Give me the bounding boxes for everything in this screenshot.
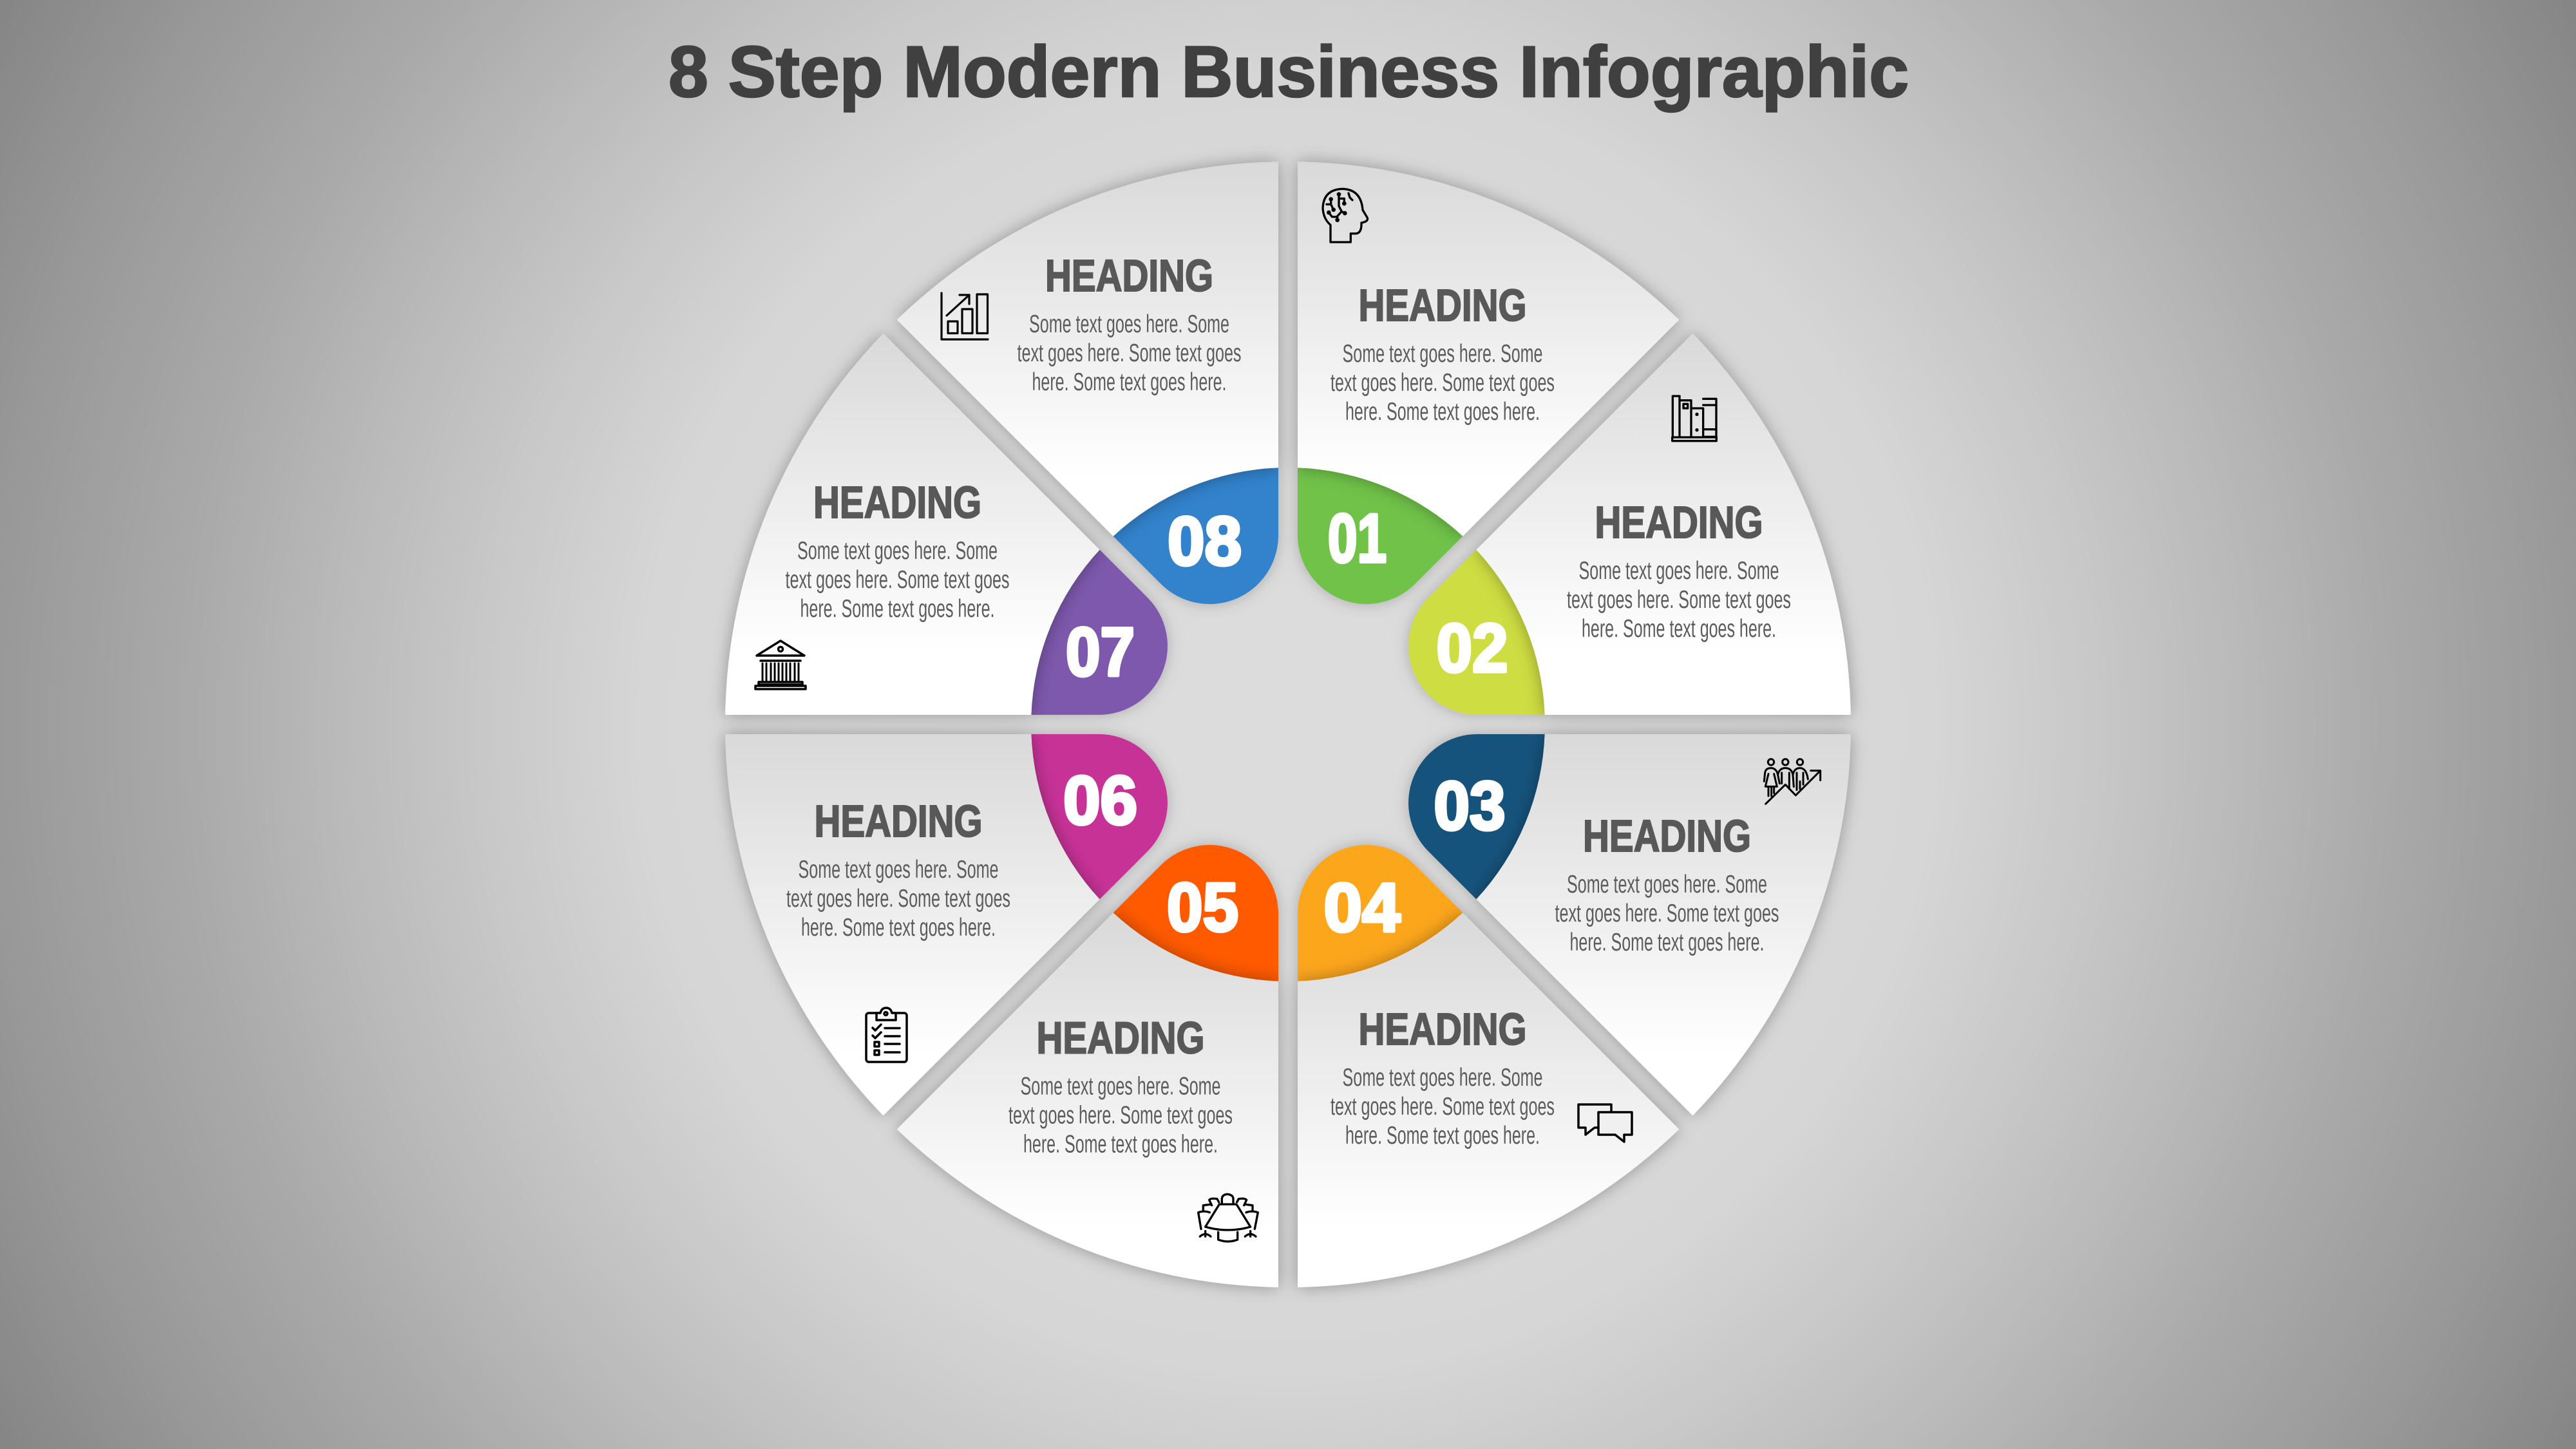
- text block: step 03: [1555, 811, 1779, 956]
- body 08: text goes here. Some text goes: [1018, 339, 1242, 367]
- body 05: [1009, 1073, 1233, 1158]
- badge 01: 01: [1328, 500, 1387, 577]
- panel: sector 08: [897, 162, 1278, 536]
- icon: bar chart with arrow: [942, 293, 988, 339]
- icon: meeting table: [1198, 1194, 1258, 1242]
- text block: step 08: [1018, 251, 1242, 396]
- heading 03: HEADING: [1583, 811, 1751, 861]
- body 02: text goes here. Some text goes: [1567, 586, 1791, 614]
- panel: sector 07: [725, 334, 1100, 715]
- badge 08: 08: [1168, 502, 1242, 580]
- body 02: Some text goes here. Some: [1579, 557, 1779, 585]
- heading 08: HEADING: [1045, 251, 1213, 301]
- badge 03: [1408, 734, 1545, 899]
- body 02: [1567, 557, 1791, 643]
- text block: step 02: [1567, 497, 1791, 643]
- body 06: text goes here. Some text goes: [786, 885, 1010, 913]
- heading 01: HEADING: [1359, 280, 1526, 330]
- badge 04: [1298, 845, 1463, 981]
- icon: people and growth arrow: [1764, 759, 1821, 804]
- body 03: here. Some text goes here.: [1570, 929, 1765, 956]
- body 07: [786, 537, 1010, 623]
- badge 02: 02: [1436, 609, 1508, 687]
- badge 08: [1113, 468, 1278, 604]
- icon: bank building: [755, 641, 806, 689]
- panel: sector 06: [725, 734, 1100, 1115]
- body 03: Some text goes here. Some: [1567, 871, 1767, 898]
- badge 06: [1031, 734, 1168, 899]
- badge 01: [1298, 468, 1463, 604]
- body 01: text goes here. Some text goes: [1331, 369, 1555, 397]
- panel: sector 05: [897, 913, 1278, 1287]
- body 07: here. Some text goes here.: [800, 595, 994, 623]
- badge 05: [1113, 845, 1278, 981]
- heading 06: HEADING: [814, 796, 983, 846]
- heading 07: HEADING: [813, 477, 981, 527]
- body 05: here. Some text goes here.: [1023, 1131, 1218, 1158]
- heading 05: HEADING: [1037, 1012, 1204, 1063]
- body 02: here. Some text goes here.: [1582, 615, 1776, 643]
- body 06: Some text goes here. Some: [799, 856, 998, 884]
- body 04: [1331, 1064, 1555, 1150]
- badge 03: 03: [1434, 767, 1506, 844]
- panel: sector 04: [1298, 913, 1679, 1287]
- body 08: [1018, 310, 1242, 396]
- badge 07: [1031, 550, 1168, 715]
- icon: checklist clipboard: [866, 1008, 907, 1062]
- panel: sector 03: [1476, 734, 1851, 1115]
- badge 02: [1408, 550, 1545, 715]
- body 05: text goes here. Some text goes: [1009, 1101, 1233, 1130]
- heading 04: HEADING: [1359, 1004, 1526, 1054]
- text block: step 01: [1331, 280, 1555, 426]
- body 04: Some text goes here. Some: [1342, 1064, 1543, 1092]
- text block: step 07: [786, 477, 1010, 623]
- heading 02: HEADING: [1595, 497, 1763, 547]
- body 03: [1555, 871, 1779, 956]
- body 07: text goes here. Some text goes: [786, 566, 1010, 594]
- text block: step 05: [1009, 1012, 1233, 1158]
- body 01: Some text goes here. Some: [1342, 340, 1543, 368]
- body 08: Some text goes here. Some: [1029, 310, 1229, 338]
- badge 07: 07: [1066, 613, 1135, 690]
- badge 04: 04: [1324, 869, 1400, 946]
- body 06: [786, 856, 1010, 942]
- badge 05: 05: [1167, 868, 1238, 945]
- body 07: Some text goes here. Some: [797, 537, 998, 565]
- body 08: here. Some text goes here.: [1032, 368, 1226, 396]
- number badges: [1031, 468, 1545, 981]
- body 04: here. Some text goes here.: [1345, 1122, 1540, 1150]
- body 04: text goes here. Some text goes: [1331, 1093, 1555, 1121]
- body 06: here. Some text goes here.: [801, 914, 996, 942]
- text block: step 04: [1331, 1004, 1555, 1150]
- title: 8 Step Modern Business Infographic: [668, 32, 1909, 112]
- body 05: Some text goes here. Some: [1020, 1073, 1221, 1100]
- badge 06: 06: [1063, 761, 1137, 838]
- panel: sector 02: [1476, 334, 1851, 715]
- panel: sector 01: [1298, 162, 1679, 536]
- sector panels: [725, 162, 1851, 1287]
- body 01: here. Some text goes here.: [1345, 398, 1540, 426]
- icon: speech bubbles: [1578, 1104, 1632, 1142]
- body 03: text goes here. Some text goes: [1555, 900, 1779, 927]
- icon: brain head: [1323, 189, 1368, 242]
- body 01: [1331, 340, 1555, 426]
- icon: books: [1672, 396, 1716, 441]
- text block: step 06: [786, 796, 1010, 942]
